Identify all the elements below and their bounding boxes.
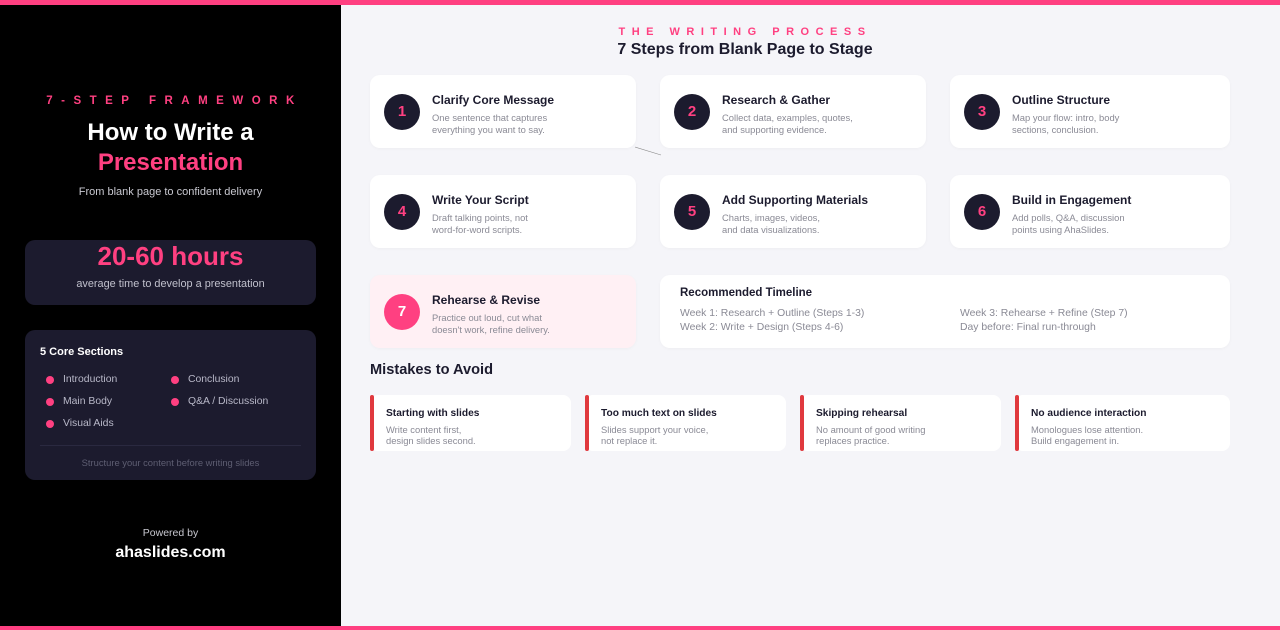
step 7: 7 <box>398 303 406 320</box>
timeline panel <box>660 275 1230 348</box>
footnote: Structure your content before writing slides <box>82 457 259 468</box>
mistake 1: design slides second. <box>386 435 476 446</box>
section list: Conclusion <box>188 374 239 385</box>
mistake 1 <box>370 395 571 451</box>
timeline items: Week 2: Write + Design (Steps 4-6) <box>680 322 843 333</box>
step 1: 1 <box>398 103 406 120</box>
step 5: Add Supporting Materials <box>722 193 868 207</box>
step 3: Outline Structure <box>1012 93 1110 107</box>
step 5: Charts, images, videos, <box>722 212 820 223</box>
mistake 4: Build engagement in. <box>1031 435 1119 446</box>
core sections heading: 5 Core Sections <box>40 346 123 358</box>
mistake 4: No audience interaction <box>1031 408 1146 419</box>
step 6: 6 <box>978 203 986 220</box>
mistake 4: Monologues lose attention. <box>1031 424 1143 435</box>
step 5: 5 <box>688 203 696 220</box>
subtitle: From blank page to confident delivery <box>79 186 262 198</box>
timeline items: Day before: Final run-through <box>960 322 1096 333</box>
header title: 7 Steps from Blank Page to Stage <box>617 41 873 58</box>
step 6 <box>950 175 1230 248</box>
mistake 1: Starting with slides <box>386 408 479 419</box>
step 2: Research & Gather <box>722 93 830 107</box>
timeline items: Week 1: Research + Outline (Steps 1-3) <box>680 308 864 319</box>
step 7: Practice out loud, cut what <box>432 312 542 323</box>
stat caption: average time to develop a presentation <box>76 278 265 290</box>
mistake 4 <box>1015 395 1230 451</box>
main title: How to Write a <box>87 119 254 146</box>
step 4: 4 <box>398 203 406 220</box>
section list: Q&A / Discussion <box>188 396 268 407</box>
step 2: Collect data, examples, quotes, <box>722 112 853 123</box>
step 1: everything you want to say. <box>432 124 545 135</box>
section list: Introduction <box>63 374 117 385</box>
left panel <box>0 5 341 626</box>
main title <box>87 119 254 176</box>
eyebrow: 7-step framework: 7-STEP FRAMEWORK <box>46 95 303 107</box>
stat box <box>25 240 316 305</box>
step 3 <box>950 75 1230 148</box>
mistake 2: Slides support your voice, <box>601 424 708 435</box>
step 3: Map your flow: intro, body <box>1012 112 1119 123</box>
step 7: Rehearse & Revise <box>432 293 540 307</box>
brand: ahaslides.com <box>115 544 226 561</box>
powered by: Powered by <box>143 527 198 539</box>
step 4: Write Your Script <box>432 193 529 207</box>
section list <box>46 374 268 429</box>
section list: Visual Aids <box>63 418 114 429</box>
step 7 <box>370 275 636 348</box>
step 6: Build in Engagement <box>1012 193 1131 207</box>
step 1: One sentence that captures <box>432 112 547 123</box>
timeline heading: Recommended Timeline <box>680 287 812 299</box>
section list: Main Body <box>63 396 112 407</box>
mistake 3: replaces practice. <box>816 435 889 446</box>
step 6: points using AhaSlides. <box>1012 224 1109 235</box>
mistake 3: Skipping rehearsal <box>816 408 907 419</box>
core sections box <box>25 330 316 480</box>
step 1: Clarify Core Message <box>432 93 554 107</box>
step 4 <box>370 175 636 248</box>
step 2: and supporting evidence. <box>722 124 827 135</box>
timeline items: Week 3: Rehearse + Refine (Step 7) <box>960 308 1128 319</box>
step 5 <box>660 175 926 248</box>
stat number: 20-60 hours <box>98 241 243 271</box>
mistake 2: Too much text on slides <box>601 408 717 419</box>
mistake 3: No amount of good writing <box>816 424 925 435</box>
mistake 1: Write content first, <box>386 424 461 435</box>
mistakes heading: Mistakes to Avoid <box>370 362 493 378</box>
top accent bar <box>0 0 1280 5</box>
mistake 2: not replace it. <box>601 435 657 446</box>
mistake 2 <box>585 395 786 451</box>
main title: Presentation <box>98 149 243 176</box>
step 2: 2 <box>688 103 696 120</box>
step 4: Draft talking points, not <box>432 212 528 223</box>
bottom accent bar <box>0 626 1280 630</box>
connector line <box>635 146 661 156</box>
timeline items <box>680 308 1128 333</box>
mistake 3 <box>800 395 1001 451</box>
header eyebrow: THE WRITING PROCESS <box>618 26 872 38</box>
step 6: Add polls, Q&A, discussion <box>1012 212 1125 223</box>
step 1 <box>370 75 636 148</box>
step 3: sections, conclusion. <box>1012 124 1099 135</box>
step 2 <box>660 75 926 148</box>
step 4: word-for-word scripts. <box>432 224 522 235</box>
step 5: and data visualizations. <box>722 224 819 235</box>
step 7: doesn't work, refine delivery. <box>432 324 550 335</box>
step 3: 3 <box>978 103 986 120</box>
